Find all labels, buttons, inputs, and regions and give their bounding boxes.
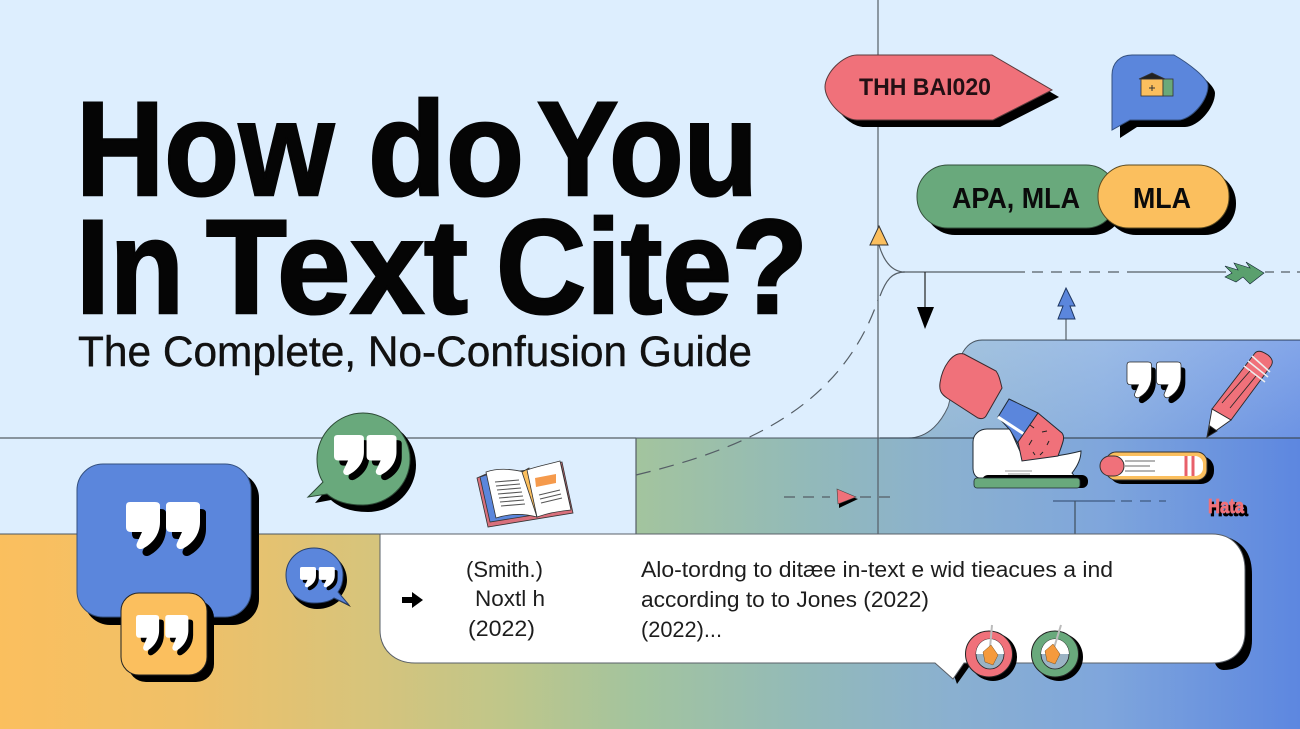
orange MLA pill	[1098, 165, 1236, 235]
icon: green ring badge	[1032, 625, 1083, 681]
green APA pill	[917, 165, 1124, 235]
arrow: red triangle	[837, 489, 858, 508]
gradient colour band	[0, 340, 1300, 729]
title: You	[537, 75, 758, 224]
orange quote card	[121, 593, 214, 682]
citation sentence text: (2022)...	[641, 617, 722, 642]
small red label: Hata	[1208, 496, 1245, 518]
citation example labels	[466, 557, 545, 641]
red arrow tag	[825, 55, 1059, 127]
icon: rolled scroll	[1100, 452, 1214, 484]
title: How	[76, 75, 335, 224]
red speckled block	[1018, 413, 1064, 461]
icon: eraser and paper stack	[973, 399, 1081, 478]
callout tail shadow	[950, 660, 974, 684]
white citation panel	[380, 534, 1252, 684]
icon: red ring badge	[966, 625, 1017, 681]
citation example labels: (2022)	[468, 616, 535, 641]
small blue quote bubble	[286, 548, 351, 609]
citation sentence text: according to to Jones (2022)	[641, 587, 929, 612]
blue speech icon	[1112, 55, 1215, 138]
citation example labels: Noxtl h	[475, 586, 545, 611]
citation sentence text: Alo-tordng to ditæe in-text e wid tieacues a ind	[641, 557, 1113, 582]
icon: green base board	[974, 475, 1088, 488]
blue eraser sleeve	[998, 399, 1038, 447]
green quote bubble	[308, 413, 416, 512]
small red label: Hata	[1210, 499, 1249, 521]
title	[76, 75, 808, 342]
icon: white quote marks	[334, 435, 402, 480]
icon: white quote marks	[300, 567, 338, 590]
arrow: blue up	[1058, 288, 1075, 319]
icon: pencil	[1207, 351, 1272, 437]
title: Cite?	[496, 193, 808, 342]
panel shadow	[1214, 538, 1252, 670]
icon: white quote marks	[136, 615, 193, 655]
title: In	[76, 193, 184, 342]
arrow: black pointer	[402, 592, 423, 608]
guide lines	[0, 0, 1300, 534]
subtitle: The Complete, No-Confusion Guide	[78, 328, 752, 376]
arrow: green right	[1225, 262, 1264, 284]
arrow: orange up	[870, 226, 888, 245]
big blue quote card	[77, 464, 259, 625]
citation example labels: (Smith.)	[466, 557, 543, 582]
orange MLA pill: MLA	[1133, 183, 1191, 215]
icon: red eraser block	[940, 354, 1002, 419]
white paper sheet	[973, 429, 1081, 478]
icon: open book	[477, 461, 573, 527]
icon: white quote marks	[126, 502, 206, 556]
title: Text	[206, 193, 468, 342]
red arrow tag: THH BAI020	[859, 74, 991, 101]
title: do	[368, 75, 524, 224]
citation sentence text	[641, 557, 1113, 642]
icon: small house	[1139, 73, 1173, 96]
arrow: black down	[917, 272, 934, 329]
green APA pill: APA, MLA	[952, 183, 1080, 215]
icon: white quote marks on band	[1127, 362, 1185, 403]
